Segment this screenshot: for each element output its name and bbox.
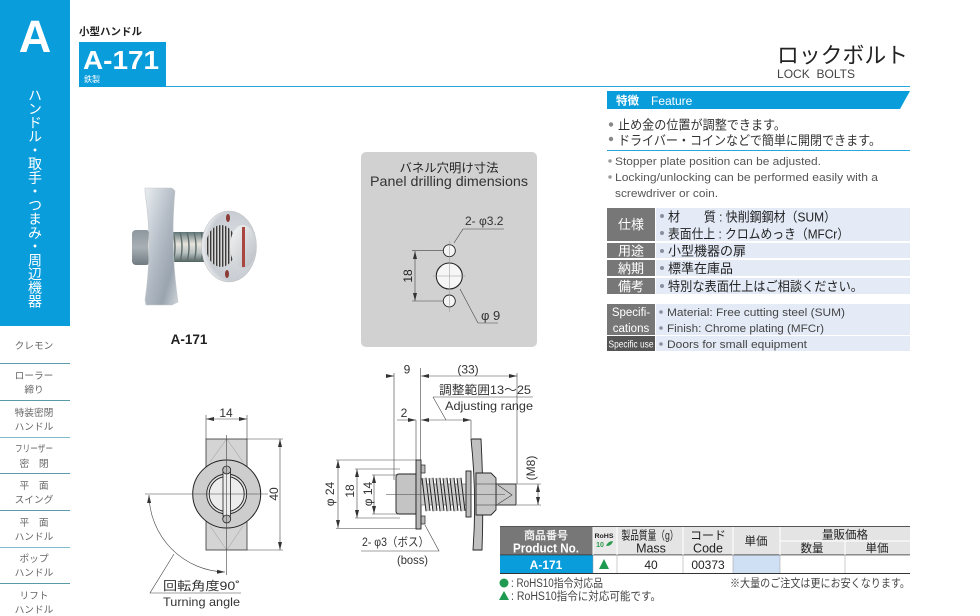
vertical category name: ハンドル・取手・つまみ・周辺機器 bbox=[27, 88, 43, 309]
sidebar navigation list: クレモン bbox=[15, 340, 53, 352]
drilling hole diagram bbox=[401, 214, 504, 323]
side view drawing: 調整範囲13～25 bbox=[439, 382, 531, 397]
table header labels: RoHS bbox=[594, 533, 614, 540]
side view drawing: 2 bbox=[401, 406, 408, 420]
side view drawing: 18 bbox=[343, 484, 357, 498]
feature banner: Feature bbox=[651, 94, 693, 108]
table data row: A-171 bbox=[530, 558, 563, 572]
specification table japanese: 用途 bbox=[618, 244, 644, 258]
front view drawing: Turning angle bbox=[163, 595, 240, 609]
specification table japanese: 仕様 bbox=[618, 217, 644, 232]
english title: LOCK BOLTS bbox=[777, 69, 855, 81]
category letter: A bbox=[19, 11, 51, 62]
specification table japanese: 表面仕上 : クロムめっき（MFCr） bbox=[668, 226, 849, 242]
front view drawing: 40 bbox=[267, 487, 281, 501]
sidebar navigation list: ローラー bbox=[15, 370, 53, 382]
specification table english bbox=[607, 304, 910, 351]
table data row: 00373 bbox=[691, 558, 725, 572]
table header labels: 商品番号 bbox=[524, 528, 568, 542]
feature list english: screwdriver or coin. bbox=[615, 188, 718, 200]
table header labels: Product No. bbox=[513, 542, 579, 556]
table header labels: 単価 bbox=[744, 534, 768, 548]
product header bbox=[79, 25, 910, 87]
product data table bbox=[500, 526, 910, 574]
feature list japanese: ドライバー・コインなどで簡単に開閉できます。 bbox=[618, 133, 881, 148]
side view drawing: 9 bbox=[404, 362, 411, 376]
panel: drilling dimensions bbox=[361, 152, 537, 347]
bolt and spring bbox=[396, 439, 516, 550]
sidebar navigation list: スイング bbox=[15, 493, 54, 506]
table header labels: 単価 bbox=[866, 541, 888, 555]
sidebar navigation list bbox=[0, 340, 70, 616]
side view drawing: (boss) bbox=[397, 553, 428, 567]
table data row bbox=[530, 558, 725, 572]
product title: ロックボルト bbox=[777, 43, 908, 68]
sidebar navigation list: ポップ bbox=[19, 553, 49, 565]
subcategory heading: 小型ハンドル bbox=[79, 25, 142, 38]
model number: A-171 bbox=[83, 45, 159, 75]
product photo: lock bolt bbox=[132, 188, 256, 305]
sidebar navigation list: 密 閉 bbox=[19, 457, 49, 470]
feature banner bbox=[607, 91, 910, 109]
feature list english: Locking/unlocking can be performed easily with a bbox=[615, 172, 879, 184]
table header labels: 数量 bbox=[800, 542, 824, 555]
table header labels: Code bbox=[693, 542, 723, 556]
table header labels: 製品質量（g） bbox=[622, 528, 678, 542]
turning angle label: 回転角度90˚ bbox=[163, 579, 240, 593]
side view drawing: φ 24 bbox=[323, 481, 337, 506]
panel heading english: Panel drilling dimensions bbox=[370, 173, 528, 189]
product label: A-171 bbox=[171, 332, 208, 347]
side view drawing: φ 14 bbox=[361, 481, 375, 506]
specification table english: Doors for small equipment bbox=[667, 339, 807, 351]
sidebar navigation list: ハンドル bbox=[15, 568, 54, 579]
side view drawing: Adjusting range bbox=[445, 399, 533, 413]
feature list japanese bbox=[607, 118, 910, 151]
specification table english: Finish: Chrome plating (MFCr) bbox=[667, 323, 824, 335]
specification table japanese: 小型機器の扉 bbox=[668, 244, 746, 258]
specification table english: cations bbox=[613, 323, 649, 335]
specification table japanese: 標準在庫品 bbox=[668, 261, 733, 276]
feature list english: Stopper plate position can be adjusted. bbox=[615, 156, 821, 168]
drilling hole diagram: φ 9 bbox=[481, 308, 500, 323]
sidebar navigation list: 特装密閉 bbox=[15, 406, 53, 419]
table header labels bbox=[513, 528, 888, 556]
rohs legend bbox=[499, 576, 661, 603]
side view drawing: 2- φ3（ボス） bbox=[362, 535, 429, 549]
specification table japanese: 納期 bbox=[618, 261, 644, 276]
sidebar navigation list: リフト bbox=[19, 591, 49, 602]
side view drawing: (33) bbox=[457, 362, 479, 376]
sidebar: category tab bbox=[0, 0, 70, 326]
specification table japanese bbox=[607, 208, 910, 294]
front view drawing bbox=[145, 406, 283, 609]
product title bbox=[777, 43, 908, 81]
panel heading: バネル穴明け寸法 bbox=[400, 161, 498, 175]
front view drawing: 14 bbox=[219, 406, 233, 420]
sidebar navigation list: ハンドル bbox=[15, 422, 54, 433]
feature list japanese: 止め金の位置が調整できます。 bbox=[618, 118, 786, 132]
specification table english: Material: Free cutting steel (SUM) bbox=[667, 307, 845, 319]
sidebar navigation list: 平 面 bbox=[19, 518, 49, 529]
side view drawing: (M8) bbox=[524, 456, 538, 480]
table header labels: 量販価格 bbox=[822, 528, 868, 542]
specification table japanese: 材 質 : 快削鋼鋼材（SUM） bbox=[668, 210, 836, 224]
table header labels: Mass bbox=[636, 542, 666, 556]
table header labels: コード bbox=[690, 528, 726, 542]
rohs legend: : RoHS10指令対応品 bbox=[511, 576, 603, 590]
sidebar navigation list: フリーザー bbox=[15, 443, 53, 455]
sidebar navigation list: 平 面 bbox=[19, 481, 49, 492]
drilling hole diagram: 2- φ3.2 bbox=[465, 214, 504, 228]
bulk order note: ※大量のご注文は更にお安くなります。 bbox=[730, 576, 910, 590]
drilling hole diagram: 18 bbox=[401, 269, 415, 283]
sidebar navigation list: 締り bbox=[24, 383, 44, 396]
sidebar navigation list: ハンドル bbox=[15, 605, 54, 616]
specification table japanese: 備考 bbox=[618, 279, 644, 294]
table header labels: 10 bbox=[596, 542, 604, 549]
feature list english bbox=[608, 156, 879, 200]
table data row: 40 bbox=[644, 558, 658, 572]
specification table english: Specifi- bbox=[612, 307, 650, 319]
sidebar navigation list: ハンドル bbox=[15, 532, 54, 543]
rohs legend: : RoHS10指令に対応可能です。 bbox=[511, 589, 661, 603]
side view drawing bbox=[323, 362, 541, 567]
specification table english: Specific use bbox=[608, 340, 654, 350]
material: 鉄製 bbox=[84, 74, 100, 84]
feature banner: 特徴 bbox=[616, 94, 639, 108]
specification table japanese: 特別な表面仕上はご相談ください。 bbox=[668, 279, 863, 294]
